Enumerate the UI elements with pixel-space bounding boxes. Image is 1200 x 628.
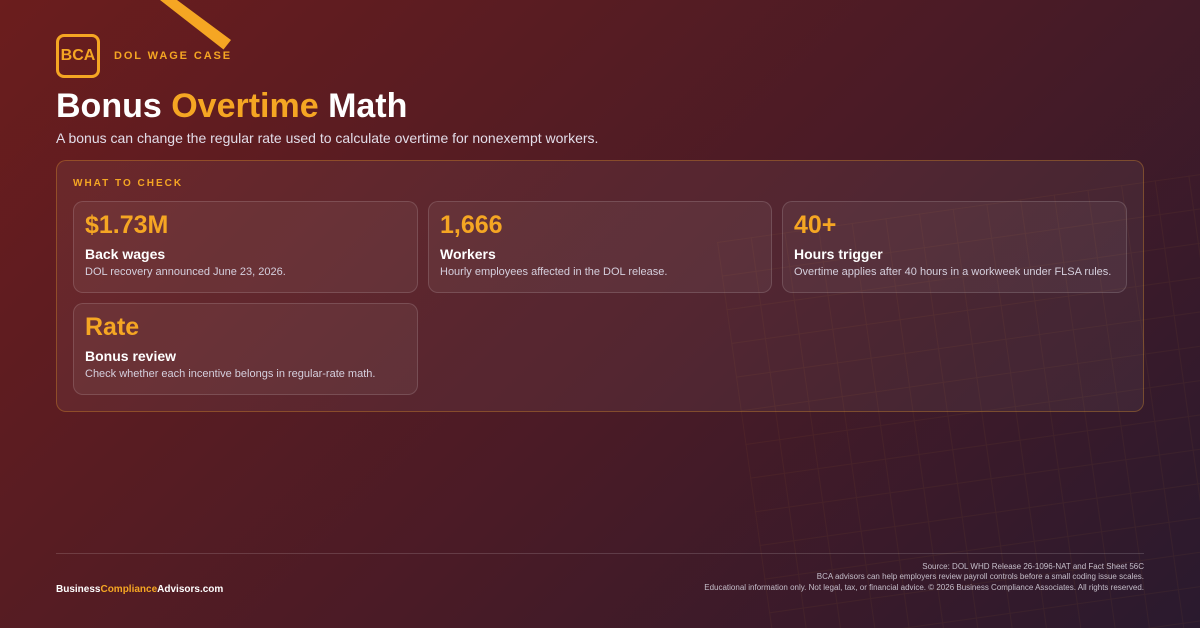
footer notes: Educational information only. Not legal, tax, or financial advice. © 2026 Business Compliance Associates. All rights reserved. xyxy=(704,582,1144,592)
footer notes xyxy=(704,562,1144,592)
card: hours trigger xyxy=(782,201,1127,293)
subtitle: A bonus can change the regular rate used to calculate overtime for nonexempt workers. xyxy=(56,130,598,146)
accent bar xyxy=(160,0,231,50)
card: bonus review: Check whether each incentive belongs in regular-rate math. xyxy=(85,368,375,380)
panel heading: WHAT TO CHECK xyxy=(73,178,183,189)
card: workers: Workers xyxy=(440,246,496,262)
card: back wages: Back wages xyxy=(85,246,165,262)
panel: what to check xyxy=(56,160,1144,412)
logo badge: BCA xyxy=(61,47,95,64)
card: workers: Hourly employees affected in the DOL release. xyxy=(440,266,667,278)
card: hours trigger: 40+ xyxy=(794,211,836,239)
card: workers: 1,666 xyxy=(440,211,503,239)
footer notes: BCA advisors can help employers review payroll controls before a small coding issue scales. xyxy=(817,572,1144,581)
card: bonus review xyxy=(73,303,418,395)
card: hours trigger: Hours trigger xyxy=(794,246,883,262)
footer notes: Source: DOL WHD Release 26-1096-NAT and Fact Sheet 56C xyxy=(922,562,1144,570)
logo badge xyxy=(56,34,100,78)
card: bonus review: Bonus review xyxy=(85,348,176,364)
card: bonus review: Rate xyxy=(85,313,139,341)
footer url: BusinessComplianceAdvisors.com xyxy=(56,584,223,595)
card: hours trigger: Overtime applies after 40 hours in a workweek under FLSA rules. xyxy=(794,266,1111,278)
card: back wages: DOL recovery announced June 23, 2026. xyxy=(85,266,286,278)
eyebrow: DOL WAGE CASE xyxy=(114,50,232,62)
card: back wages xyxy=(73,201,418,293)
title: Bonus Overtime Math xyxy=(56,87,407,125)
card: workers xyxy=(428,201,772,293)
card: back wages: $1.73M xyxy=(85,211,168,239)
